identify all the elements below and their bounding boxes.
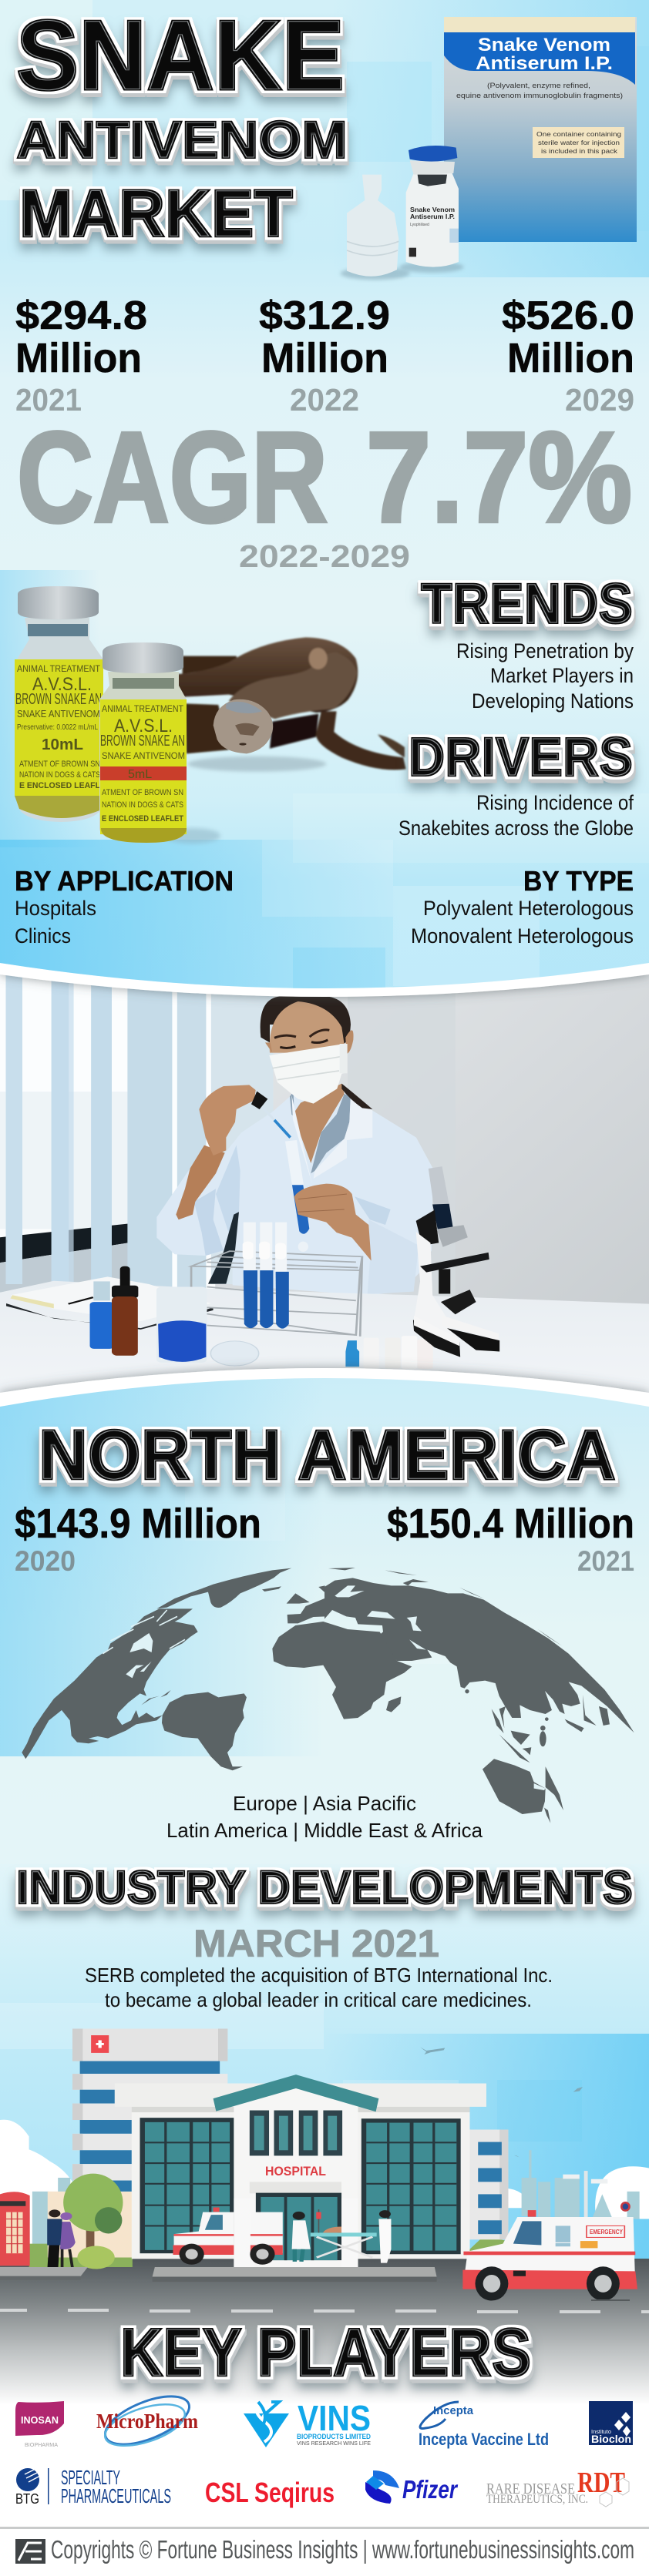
illustration: left antivenom vial, 10mL: 10mL — [42, 736, 83, 753]
illustration: right antivenom vial, 5mL: E ENCLOSED LEAFLET — [102, 814, 183, 823]
three blue test tubes — [243, 1223, 289, 1329]
lab coat — [156, 1092, 433, 1296]
illustration: right antivenom vial, 5mL: NATION IN DOGS & CATS — [102, 800, 183, 810]
test tube rack — [191, 1251, 362, 1337]
text: trends description: Rising Penetration by — [456, 639, 634, 662]
mask — [269, 1044, 348, 1104]
tree — [63, 2174, 123, 2269]
illustration: brown snake — [177, 637, 406, 772]
logo: Instituto Bioclon: Bioclon — [591, 2433, 631, 2445]
background: lower section — [0, 1340, 649, 2280]
CAGR figure: 2022-2029 — [239, 538, 410, 574]
logo: BTG Specialty Pharmaceuticals — [15, 2466, 171, 2507]
grass — [29, 2244, 133, 2267]
eastern hemisphere — [272, 1568, 634, 1823]
logo: Instituto Bioclon — [589, 2401, 633, 2445]
illustration: right antivenom vial, 5mL: BROWN SNAKE AN — [100, 733, 185, 750]
illustration: left antivenom vial, 10mL: Preservative: 0.0022 mL/mL — [17, 723, 98, 732]
logo: VINS Bioproducts — [244, 2398, 371, 2447]
product: antiserum box: equine antivenom immunoglobulin fragments) — [456, 92, 623, 100]
segment: by application: BY APPLICATION — [15, 865, 234, 897]
product: antiserum box: sterile water for injection — [538, 139, 620, 146]
illustration: left antivenom vial, 10mL: SNAKE ANTIVENOM — [17, 708, 100, 719]
heading: trends: TRENDS — [421, 572, 633, 636]
logo: Inosan Biopharma — [15, 2401, 64, 2448]
illustration: left antivenom vial, 10mL: ANIMAL TREATMENT — [17, 663, 101, 674]
illustration: right antivenom vial, 5mL: SNAKE ANTIVENOM — [102, 750, 185, 761]
tower — [48, 2028, 227, 2258]
product: antiserum box: One container containing — [536, 130, 621, 138]
illustration: left antivenom vial, 10mL: NATION IN DOGS & CATS — [19, 770, 100, 780]
product: antiserum box — [444, 17, 637, 242]
logo: Rare Disease Therapeutics RDT: THERAPEUTICS, INC. — [486, 2493, 588, 2506]
product: antiserum box: (Polyvalent, enzyme refined, — [487, 82, 590, 90]
illustration: hospital scene — [0, 2028, 649, 2301]
product: antiserum vial: Antiserum I.P. — [410, 213, 455, 220]
segment: by application — [15, 865, 234, 948]
text: development description — [85, 1964, 553, 2011]
illustration: right antivenom vial, 5mL: ANIMAL TREATMENT — [102, 703, 184, 714]
text: other regions: Latin America | Middle East & Africa — [166, 1819, 483, 1842]
illustration: left antivenom vial, 10mL — [15, 586, 103, 822]
person — [156, 996, 433, 1296]
hair and face — [261, 996, 351, 1045]
stat: 2029: 2029 — [565, 382, 634, 418]
logo: Incepta Vaccine — [419, 2402, 549, 2449]
nurse and gurney — [292, 2209, 391, 2263]
text: trends description — [456, 639, 634, 713]
illustration: left antivenom vial, 10mL: ATMENT OF BROWN SN — [19, 760, 100, 769]
product: antiserum vial: Snake Venom — [410, 206, 455, 213]
stat: 2022 — [259, 293, 390, 418]
logo: Instituto Bioclon: Instituto — [591, 2430, 611, 2435]
small ambulance — [173, 2208, 283, 2265]
segment: by type: Polyvalent Heterologous — [423, 897, 634, 920]
microscope — [413, 1166, 499, 1357]
stat: 2029 — [502, 293, 634, 418]
logo: VINS Bioproducts: VINS RESEARCH WINS LIFE — [297, 2440, 371, 2447]
main title: ANTIVENOM — [16, 110, 348, 169]
text: trends description: Developing Nations — [472, 689, 634, 713]
segment: by type: Monovalent Heterologous — [411, 924, 634, 948]
text: drivers description: Rising Incidence of — [476, 791, 634, 814]
illustration: right antivenom vial, 5mL — [99, 642, 220, 844]
white lower area — [0, 2403, 649, 2576]
logo: BTG Specialty Pharmaceuticals: SPECIALTY — [61, 2466, 120, 2489]
stat: 2029: Million — [507, 335, 634, 381]
bottles and beaker — [90, 1266, 259, 1366]
text: other regions: Europe | Asia Pacific — [233, 1792, 416, 1815]
ground and road — [0, 2259, 649, 2405]
CAGR figure: CAGR — [17, 406, 328, 549]
product: antiserum box: is included in this pack — [541, 147, 618, 155]
world map — [15, 1568, 634, 1823]
text: development description: to became a global leader in critical care medicines. — [105, 1988, 532, 2011]
product: antiserum box: Snake Venom — [478, 35, 610, 55]
stat: north america 2020: 2020 — [15, 1545, 76, 1577]
logo: MicroPharm: MicroPharm — [96, 2410, 198, 2433]
logo: VINS Bioproducts: BIOPRODUCTS LIMITED — [297, 2433, 371, 2441]
segment: by type: BY TYPE — [523, 865, 634, 897]
segment: by application: Hospitals — [15, 897, 96, 920]
plane and birds — [420, 2047, 583, 2158]
camera pole and road sign — [563, 2171, 631, 2218]
heading: north america: NORTH AMERICA — [39, 1416, 616, 1494]
stat: north america 2020: $143.9 Million — [15, 1501, 261, 1547]
stat: 2022: Million — [261, 335, 388, 381]
main title: SNAKE — [16, 0, 345, 111]
forearm and dropper hand — [176, 1145, 225, 1219]
main title: MARKET — [19, 176, 293, 251]
logo: Incepta Vaccine: Incepta — [433, 2404, 474, 2417]
couple — [47, 2209, 76, 2271]
illustration: right antivenom vial, 5mL: A.V.S.L. — [114, 716, 173, 736]
illustration: right antivenom vial, 5mL: ATMENT OF BROWN SN — [102, 788, 183, 797]
stat: 2021 — [15, 293, 147, 418]
logo: BTG Specialty Pharmaceuticals: BTG — [15, 2491, 39, 2507]
stat: 2021: Million — [15, 335, 142, 381]
main building — [115, 2075, 486, 2267]
logo: Rare Disease Therapeutics RDT: RARE DISEASE — [486, 2480, 575, 2497]
date: march 2021: MARCH 2021 — [193, 1922, 439, 1965]
logo: Pfizer: Pfizer — [402, 2475, 459, 2504]
illustration: hospital scene: EMERGENCY — [590, 2229, 624, 2236]
logo: VINS Bioproducts: VINS — [298, 2398, 371, 2438]
illustration: hospital scene: HOSPITAL — [265, 2164, 326, 2179]
product: plastic water ampoule — [341, 175, 410, 280]
stat: 2029: $526.0 — [502, 293, 634, 338]
held tube and hand — [285, 1140, 304, 1185]
logo: Incepta Vaccine: Incepta Vaccine Ltd — [419, 2430, 549, 2449]
segment: by application: Clinics — [15, 924, 71, 948]
notebook — [6, 1276, 214, 1330]
main title — [16, 0, 348, 251]
photo: scientist in laboratory — [0, 954, 649, 1417]
logo: Inosan Biopharma: BIOPHARMA — [25, 2443, 58, 2448]
small vials on table — [345, 1336, 433, 1369]
large ambulance — [462, 2210, 637, 2301]
western hemisphere — [15, 1568, 326, 1791]
white curved bands — [0, 955, 649, 1425]
text: other regions — [166, 1792, 483, 1842]
logo: CSL Seqirus: CSL Seqirus — [205, 2477, 335, 2508]
right wing — [468, 2130, 508, 2239]
illustration: left antivenom vial, 10mL: A.V.S.L. — [32, 674, 92, 695]
product: antiserum vial: Lyophilised — [410, 223, 429, 227]
stat: 2022: $312.9 — [259, 293, 390, 338]
logo: Rare Disease Therapeutics RDT — [486, 2467, 629, 2507]
illustration: left antivenom vial, 10mL: E ENCLOSED LEAFL — [19, 781, 100, 790]
background: upper section — [0, 0, 649, 1001]
text: development description: SERB completed the acquisition of BTG International Inc. — [85, 1964, 553, 1987]
stat: north america 2020 — [15, 1501, 261, 1577]
logo: BTG Specialty Pharmaceuticals: PHARMACEUTICALS — [61, 2484, 171, 2507]
logo: Rare Disease Therapeutics RDT: RDT — [577, 2467, 625, 2499]
phone booth — [0, 2192, 30, 2266]
icon: Fortune Business Insights mark — [15, 2539, 45, 2564]
stat: north america 2021: 2021 — [577, 1545, 634, 1577]
logo: MicroPharm — [96, 2386, 198, 2454]
heading: drivers: DRIVERS — [409, 727, 633, 788]
stat: 2021: 2021 — [15, 382, 82, 418]
logo: Inosan Biopharma: INOSAN — [21, 2414, 59, 2426]
heading: industry developments: INDUSTRY DEVELOPMENTS — [16, 1861, 633, 1914]
logo: Pfizer — [365, 2470, 459, 2504]
segment: by type — [411, 865, 634, 948]
pavements — [0, 2267, 437, 2282]
heading: key players: KEY PLAYERS — [120, 2314, 531, 2390]
ponytail — [341, 1084, 372, 1109]
illustration: right antivenom vial, 5mL: 5mL — [128, 768, 152, 781]
text: trends description: Market Players in — [490, 664, 634, 687]
footer rule — [0, 2527, 649, 2529]
CAGR figure — [17, 406, 632, 574]
product: antiserum box: Antiserum I.P. — [476, 53, 613, 74]
clouds and skyline — [0, 2120, 649, 2252]
stat: 2021: $294.8 — [15, 293, 147, 338]
table — [0, 1281, 649, 1402]
illustration: left antivenom vial, 10mL: BROWN SNAKE AN — [15, 691, 102, 708]
neck and shirt — [293, 1084, 345, 1163]
stat: north america 2021 — [387, 1501, 634, 1577]
stat: 2022: 2022 — [290, 382, 359, 418]
product: antiserum vial — [399, 146, 464, 273]
text: drivers description — [398, 791, 634, 840]
